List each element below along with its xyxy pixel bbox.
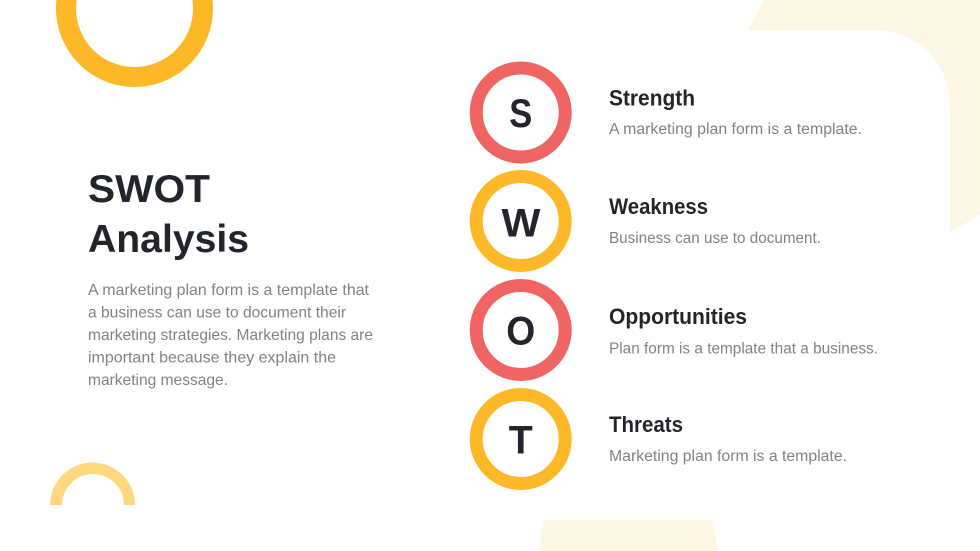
item: Strength [609,86,862,138]
badge: S [476,68,565,157]
title: Analysis [88,218,249,261]
badge: T [476,394,565,484]
decoration: top-right cream shape [748,0,980,232]
badge: O: O [506,310,535,354]
badge: O [476,286,565,374]
item: Strength: A marketing plan form is a template. [609,121,862,138]
item: Opportunities: Opportunities [609,304,747,329]
title [88,168,249,261]
description text block: A marketing plan form is a template that [88,282,370,299]
decoration: bottom cream shape [539,520,718,551]
badge: S: S [509,92,532,136]
item: Threats [609,412,847,465]
decoration: top-left yellow ring [66,0,203,77]
decoration: bottom-left yellow arc [50,462,135,505]
description text block: important because they explain the [88,350,336,366]
description text block: marketing strategies. Marketing plans are [88,327,373,344]
item: Threats: Threats [609,412,683,437]
item: Weakness: Weakness [609,194,708,219]
badge: T: T [509,418,533,462]
item: Strength: Strength [609,86,695,110]
description text block [88,282,373,389]
item: Opportunities [609,304,878,358]
description text block: marketing message. [88,372,228,389]
badge: W [476,176,565,266]
badge: W: W [502,202,541,246]
item: Weakness [609,194,821,247]
description text block: a business can use to document their [88,304,347,322]
title: SWOT [88,168,210,211]
item: Opportunities: Plan form is a template that a business. [609,340,878,358]
item: Threats: Marketing plan form is a template. [609,448,847,465]
item: Weakness: Business can use to document. [609,230,821,247]
